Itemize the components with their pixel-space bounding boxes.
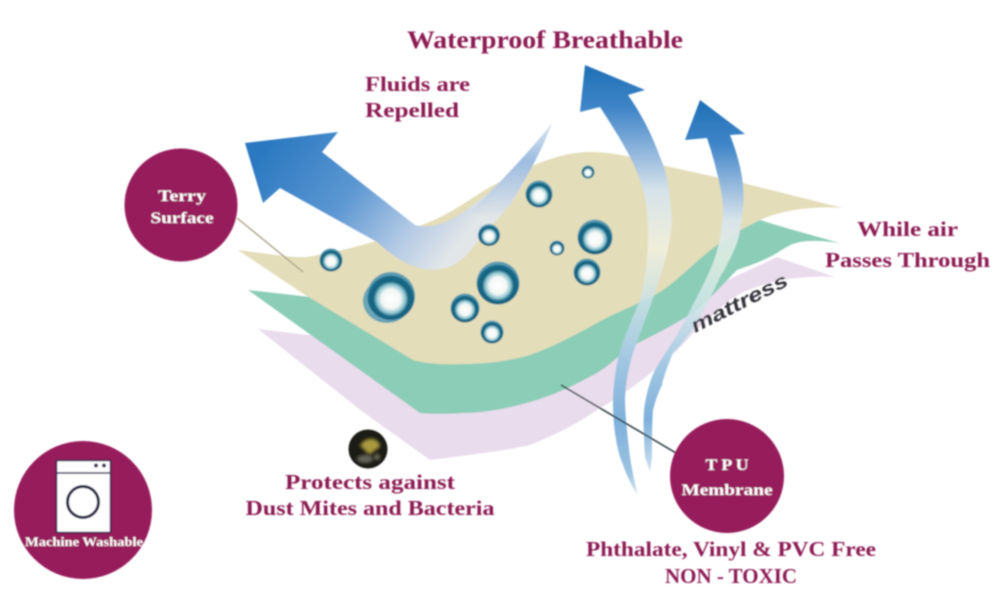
- badge: TPU membrane: [670, 419, 784, 533]
- badge: TPU membrane: Membrane: [682, 482, 772, 499]
- leader line: terry surface: [237, 218, 303, 272]
- leader line: TPU membrane: [561, 385, 676, 453]
- badge: terry surface: Terry: [158, 188, 206, 205]
- text: while air passes through: Passes Through: [825, 248, 990, 272]
- arrow: air rising right: [644, 100, 745, 472]
- text: while air passes through: [825, 217, 990, 272]
- badge: machine washable: [14, 441, 152, 579]
- text: fluids are repelled: [365, 72, 470, 122]
- text: protects against dust mites: Protects against: [285, 470, 455, 494]
- label: mattress: mattress: [687, 270, 792, 337]
- arrow: air rising left: [580, 65, 672, 495]
- icon: dust mite orb: [348, 430, 388, 468]
- label: machine washable: Machine Washable: [25, 535, 144, 549]
- badge: terry surface: Surface: [150, 210, 214, 227]
- text: fluids are repelled: Fluids are: [365, 72, 470, 96]
- layer: green TPU membrane: [248, 220, 840, 414]
- layer: lilac mattress sheet: [258, 257, 835, 460]
- arrow: fluids repelled: [245, 123, 552, 270]
- droplets: [320, 166, 612, 344]
- text: protects against dust mites: Dust Mites and Bacteria: [246, 496, 495, 520]
- text: phthalate free non-toxic: [586, 537, 876, 588]
- text: while air passes through: While air: [857, 217, 958, 241]
- icon: washing machine: [56, 460, 110, 532]
- layer: cream terry surface: [238, 152, 843, 364]
- text: phthalate free non-toxic: NON - TOXIC: [665, 564, 797, 588]
- heading: waterproof breathable: Waterproof Breathable: [407, 27, 683, 54]
- text: fluids are repelled: Repelled: [365, 98, 459, 122]
- text: protects against dust mites: [246, 470, 495, 520]
- badge: terry surface: [124, 148, 238, 262]
- text: phthalate free non-toxic: Phthalate, Vinyl & PVC Free: [586, 537, 876, 561]
- badge: TPU membrane: T P U: [706, 457, 749, 474]
